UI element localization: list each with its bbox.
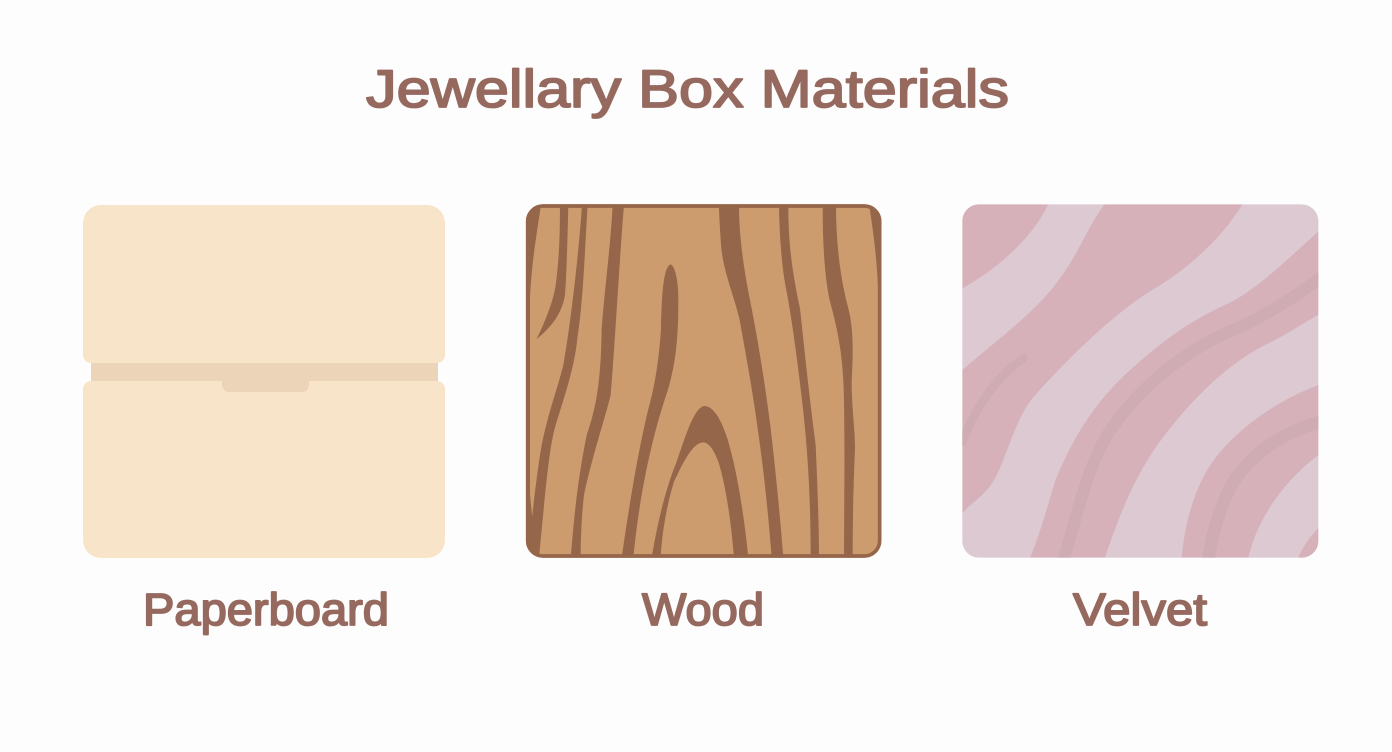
paperboard inner band: [91, 360, 438, 384]
panel: velvet: [962, 204, 1320, 560]
label: paperboard: Paperboard: [143, 584, 389, 635]
velvet folds: [962, 204, 1320, 560]
paperboard tab: [222, 363, 309, 392]
panel: paperboard: [83, 205, 445, 558]
label: wood: Wood: [642, 584, 764, 635]
velvet sheen strands: [962, 278, 1320, 560]
title: Jewellary Box Materials: [366, 60, 1009, 119]
paperboard base: [83, 381, 445, 558]
wood frame: [528, 206, 880, 556]
label: velvet: Velvet: [1073, 584, 1208, 635]
panel: wood: [526, 204, 883, 558]
paperboard lid: [83, 205, 445, 392]
wood grain: [526, 205, 883, 558]
